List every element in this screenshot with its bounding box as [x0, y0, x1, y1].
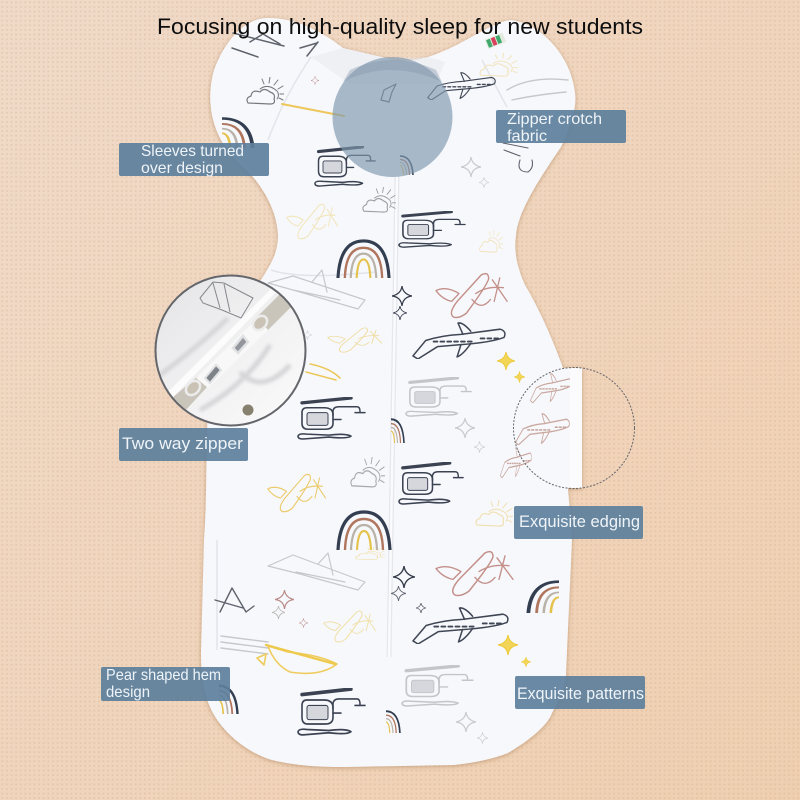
print sketch	[200, 282, 253, 318]
label: sleeves turned over design: Sleeves turned	[141, 143, 244, 160]
fabric print: rainbows	[191, 119, 590, 733]
label: two way zipper: Two way zipper	[122, 434, 243, 453]
zipper sliders	[184, 380, 202, 396]
label: sleeves turned over design: over design	[141, 160, 223, 177]
label: exquisite edging: Exquisite edging	[519, 512, 640, 531]
fabric print: dark jets	[413, 73, 508, 644]
zoom circle: two way zipper	[156, 276, 306, 426]
label: zipper crotch fabric: Zipper crotch	[507, 111, 602, 128]
fabric print: stars	[272, 76, 531, 744]
label: pear shaped hem design: Pear shaped hem	[106, 667, 221, 684]
label: pear shaped hem design: design	[106, 684, 150, 701]
fabric print: suns	[247, 53, 518, 560]
label: two way zipper	[119, 428, 248, 461]
fabric print: yellow planes	[257, 104, 382, 673]
fabric folds	[160, 318, 290, 410]
label: sleeves turned over design	[119, 143, 269, 177]
title: Focusing on high-quality sleep for new students	[157, 14, 643, 39]
label: zipper crotch fabric	[496, 110, 626, 145]
label: zipper crotch fabric: fabric	[507, 128, 547, 145]
fabric print: red biplanes	[436, 274, 513, 596]
sewn label tag	[485, 33, 506, 49]
fabric print: small plane at the collar	[381, 84, 396, 102]
garment: white swaddle body	[201, 18, 582, 767]
label: pear shaped hem design	[101, 667, 230, 701]
fabric print: grey and tan jets	[215, 33, 572, 654]
fabric print: grey helicopters	[402, 378, 473, 706]
zipper tape ends	[173, 376, 207, 410]
fabric print: helicopters	[298, 147, 465, 735]
label: exquisite patterns: Exquisite patterns	[517, 684, 644, 703]
dashed circle: edging detail	[514, 368, 634, 488]
label: exquisite edging	[514, 506, 643, 539]
highlight circle: zipper crotch	[332, 57, 452, 177]
label: exquisite patterns	[515, 676, 645, 709]
exquisite edging flap highlight	[570, 368, 582, 488]
zipper line	[389, 176, 397, 657]
